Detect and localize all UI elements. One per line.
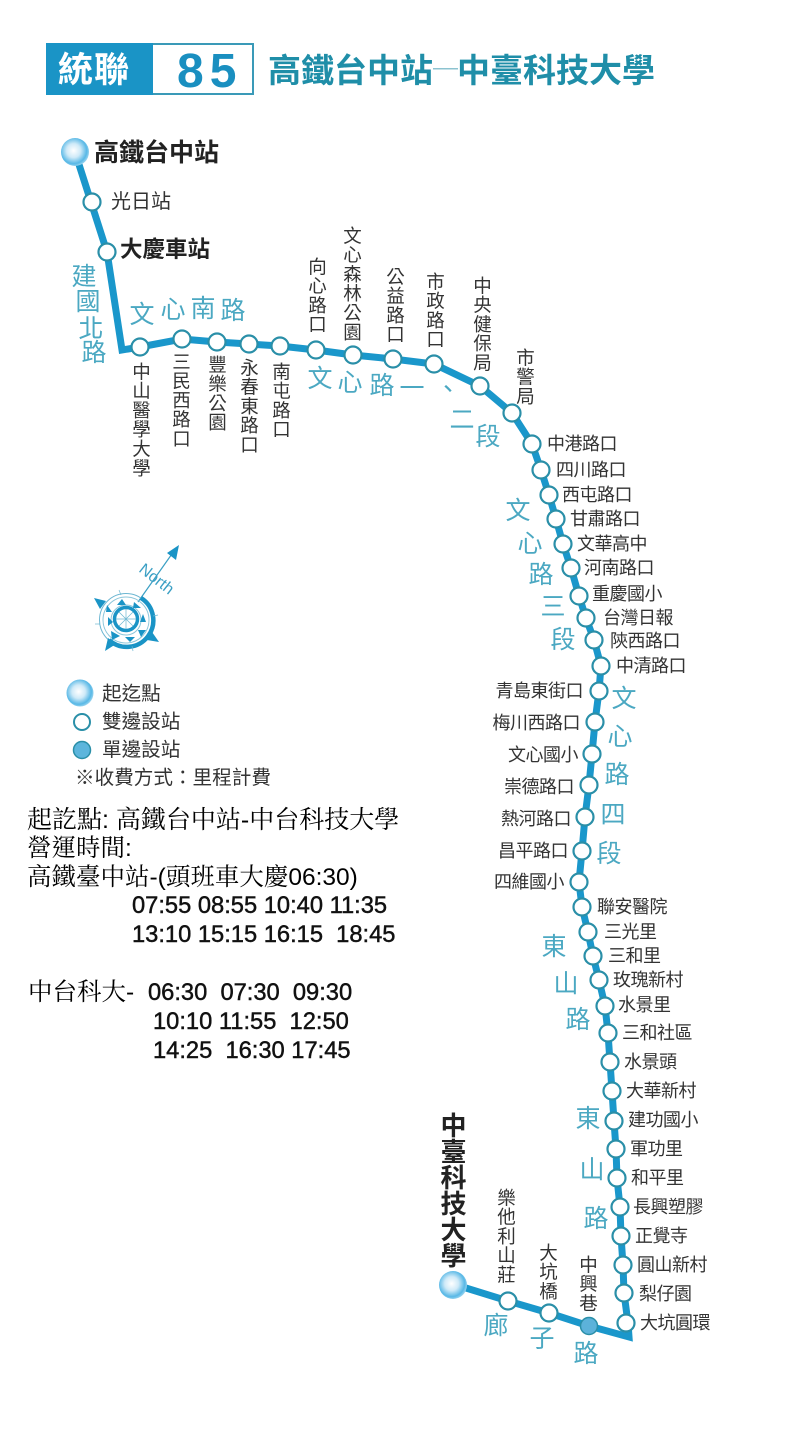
right side stop labels: 重慶國小 (592, 584, 662, 604)
road name labels: 國 (75, 288, 101, 316)
road name labels: 路 (528, 561, 554, 589)
right side stop labels: 三光里 (604, 922, 657, 942)
road name labels: 文 (129, 301, 155, 329)
road name labels (71, 263, 637, 1368)
road name labels: 心 (517, 530, 543, 558)
right side stop labels: 大坑圓環 (640, 1313, 710, 1333)
road name labels: 路 (583, 1205, 609, 1233)
left side stop labels: 熱河路口 (501, 809, 571, 829)
road name labels: 二 (449, 406, 475, 434)
icon: compass (94, 545, 179, 651)
road name labels: 段 (475, 423, 501, 451)
legend: ※收費方式：里程計費 (75, 767, 271, 789)
right side stop labels: 和平里 (631, 1168, 684, 1188)
road name labels: 路 (369, 372, 395, 400)
road name labels: 南 (190, 295, 216, 323)
schedule text: 14:25 16:30 17:45 (153, 1038, 351, 1064)
right side stop labels: 中港路口 (547, 434, 617, 454)
left side stop labels: 崇德路口 (504, 777, 574, 797)
vertical stop labels: 中興巷 (578, 1255, 598, 1313)
road name labels: 一 (399, 375, 425, 403)
schedule text: 07:55 08:55 10:40 11:35 (132, 893, 387, 919)
road name labels: 山 (579, 1156, 605, 1184)
road name labels: 文 (307, 365, 333, 393)
schedule text: 中台科大- (28, 978, 134, 1006)
left side stop labels: 青島東街口 (496, 681, 583, 701)
right side stop labels: 正覺寺 (635, 1226, 688, 1246)
vertical stop labels: 三民西路口 (170, 352, 192, 448)
road name labels: 心 (337, 369, 363, 397)
legend (66, 680, 271, 789)
right side stop labels: 西屯路口 (562, 485, 632, 505)
right side stop labels: 長興塑膠 (633, 1197, 703, 1217)
schedule text: 06:30 07:30 09:30 (148, 980, 352, 1006)
right side stop labels: 聯安醫院 (597, 897, 667, 917)
title (268, 52, 655, 89)
road name labels: 建 (71, 263, 97, 291)
route number badge: 85 (177, 45, 242, 98)
schedule text: 10:10 11:55 12:50 (153, 1009, 349, 1035)
road name labels: 路 (220, 297, 246, 325)
road name labels: 三 (540, 593, 566, 621)
right side stop labels: 陝西路口 (610, 631, 680, 651)
vertical stop labels: 大坑橋 (538, 1243, 558, 1301)
right side stop labels: 大華新村 (626, 1081, 696, 1101)
legend: 單邊設站 (102, 739, 180, 761)
road name labels: 東 (575, 1105, 601, 1133)
vertical stop labels: 中央健保局 (472, 276, 492, 372)
icon: compass: North (136, 561, 177, 598)
road name labels: 山 (553, 970, 579, 998)
road name labels: 路 (573, 1340, 599, 1368)
stop: 大慶車站: 大慶車站 (120, 237, 210, 262)
vertical stop labels: 市政路口 (424, 272, 446, 349)
road name labels: 東 (541, 933, 567, 961)
road name labels: 路 (565, 1006, 591, 1034)
vertical stop labels: 文心森林公園 (342, 226, 362, 342)
right side stop labels: 梨仔園 (639, 1284, 692, 1304)
right side stop labels: 河南路口 (584, 558, 654, 578)
left side stop labels: 梅川西路口 (492, 713, 580, 733)
vertical stop labels: 市警局 (514, 348, 536, 406)
road name labels: 廊 (483, 1312, 509, 1340)
right side stop labels: 三和里 (608, 946, 661, 966)
right side stop labels: 建功國小 (628, 1110, 698, 1130)
route line (75, 152, 629, 1337)
road name labels: 北 (78, 315, 104, 343)
right side stop labels: 三和社區 (622, 1023, 692, 1043)
right side stop labels: 台灣日報 (603, 608, 673, 628)
vertical stop labels: 向心路口 (306, 257, 328, 334)
legend: 雙邊設站 (102, 711, 180, 733)
road name labels: 四 (600, 801, 626, 829)
vertical stop labels: 永春東路口 (238, 358, 260, 454)
road name labels: 路 (604, 761, 630, 789)
vertical stop labels: 公益路口 (384, 267, 406, 344)
route number badge (46, 43, 253, 98)
left side stop labels: 四維國小 (494, 872, 564, 892)
right side stop labels: 圓山新村 (637, 1255, 707, 1275)
terminal: 高鐵台中站: 高鐵台中站 (94, 138, 219, 167)
right side stop labels: 四川路口 (556, 460, 626, 480)
left side stop labels (492, 681, 583, 892)
title: 高鐵台中站 (268, 52, 433, 89)
legend: 起迄點 (102, 683, 161, 705)
schedule text: 高鐵臺中站-(頭班車大慶06:30) (27, 863, 358, 891)
right side stop labels: 甘肅路口 (570, 509, 640, 529)
road name labels: 、 (435, 376, 461, 404)
right side stop labels: 水景頭 (624, 1052, 677, 1072)
right side stop labels: 中清路口 (616, 656, 686, 676)
schedule text: 營運時間: (27, 834, 132, 862)
right side stop labels: 軍功里 (630, 1139, 683, 1159)
road name labels: 文 (611, 685, 637, 713)
title: 中臺科技大學 (457, 52, 655, 89)
right side stop labels: 文華高中 (577, 534, 647, 554)
schedule text: 13:10 15:15 16:15 18:45 (132, 922, 395, 948)
right side stop labels: 玫瑰新村 (613, 970, 683, 990)
vertical stop labels: 中山醫學大學 (130, 362, 152, 478)
road name labels: 子 (529, 1325, 555, 1353)
right side stop labels (547, 434, 710, 1333)
schedule text: 起訖點: 高鐵台中站-中台科技大學 (27, 806, 399, 834)
right side stop labels: 水景里 (618, 995, 671, 1015)
road name labels: 路 (81, 339, 107, 367)
route number badge: 統聯 (58, 51, 130, 90)
vertical stop labels: 豐樂公園 (206, 355, 228, 432)
vertical stop labels (130, 226, 598, 1313)
stop: 中興巷 one-side (580, 1318, 598, 1334)
vertical stop labels: 樂他利山莊 (496, 1188, 516, 1284)
road name labels: 心 (607, 723, 633, 751)
stops along the route (132, 330, 634, 1332)
left side stop labels: 昌平路口 (498, 841, 568, 861)
road name labels: 段 (596, 840, 622, 868)
terminal: 中臺科技大學: 中臺科技大學 (437, 1112, 467, 1268)
stop: 光日站: 光日站 (111, 190, 171, 213)
left side stop labels: 文心國小 (508, 745, 578, 765)
schedule text (27, 806, 399, 1064)
road name labels: 心 (160, 296, 186, 324)
road name labels: 段 (550, 626, 576, 654)
stop: 光日站 (84, 190, 171, 213)
road name labels: 文 (505, 497, 531, 525)
vertical stop labels: 南屯路口 (270, 362, 292, 439)
